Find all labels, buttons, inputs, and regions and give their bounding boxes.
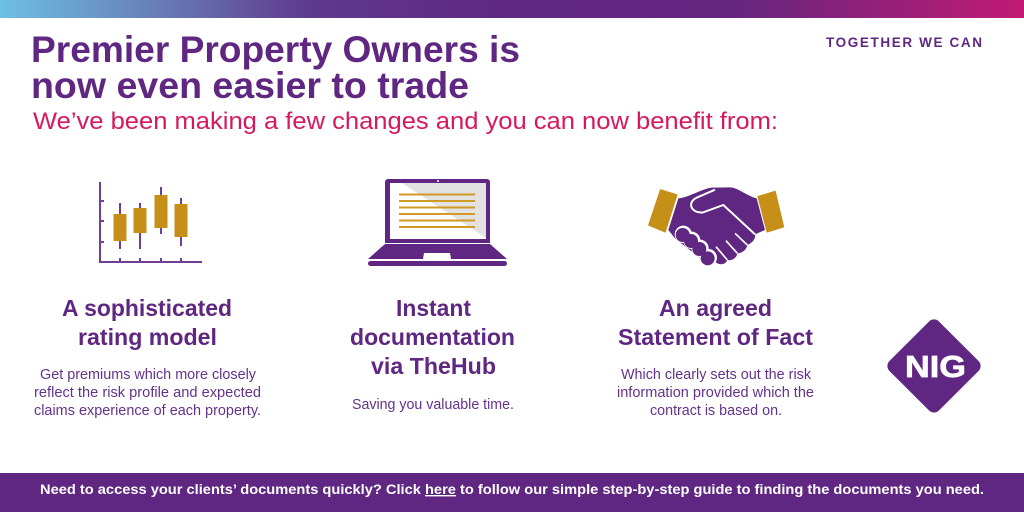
heading: instant documentation: documentation [350, 324, 515, 350]
text: rating model description [34, 367, 261, 419]
text: rating model description: reflect the risk profile and expected [34, 385, 261, 401]
heading: statement of fact: Statement of Fact [618, 324, 813, 350]
tagline: TOGETHER WE CAN [826, 35, 982, 50]
text: rating model description: claims experience of each property. [34, 403, 261, 419]
heading: statement of fact: An agreed [659, 295, 772, 321]
icon: candlestick chart [100, 182, 202, 262]
text: statement description: information provided which the [617, 385, 814, 401]
title: now even easier to trade [31, 64, 469, 106]
text: statement description: Which clearly sets out the risk [621, 367, 812, 383]
icon: laptop [368, 179, 507, 266]
footer banner [0, 473, 1024, 512]
text: documentation description: Saving you valuable time. [352, 397, 514, 413]
title [31, 28, 520, 106]
heading: sophisticated rating model [62, 295, 232, 350]
footer banner: Need to access your clients’ documents quickly? Click here to follow our simple step-by-step guide to finding the documents you need. [40, 481, 984, 497]
heading: statement of fact [618, 295, 813, 350]
top gradient bar [0, 0, 1024, 18]
text: rating model description: Get premiums which more closely [40, 367, 257, 383]
heading: instant documentation: Instant [396, 295, 471, 321]
text: statement description: contract is based on. [650, 403, 782, 419]
icon: handshake [649, 187, 783, 266]
heading: instant documentation: via TheHub [371, 353, 496, 379]
heading: sophisticated rating model: rating model [78, 324, 217, 350]
heading: instant documentation [350, 295, 515, 379]
logo: NIG diamond: NIG [905, 349, 966, 384]
text: statement description [617, 367, 814, 419]
logo: NIG diamond [885, 317, 983, 415]
title: Premier Property Owners is [31, 28, 520, 70]
subtitle: We’ve been making a few changes and you can now benefit from: [33, 108, 778, 135]
heading: sophisticated rating model: A sophisticated [62, 295, 232, 321]
